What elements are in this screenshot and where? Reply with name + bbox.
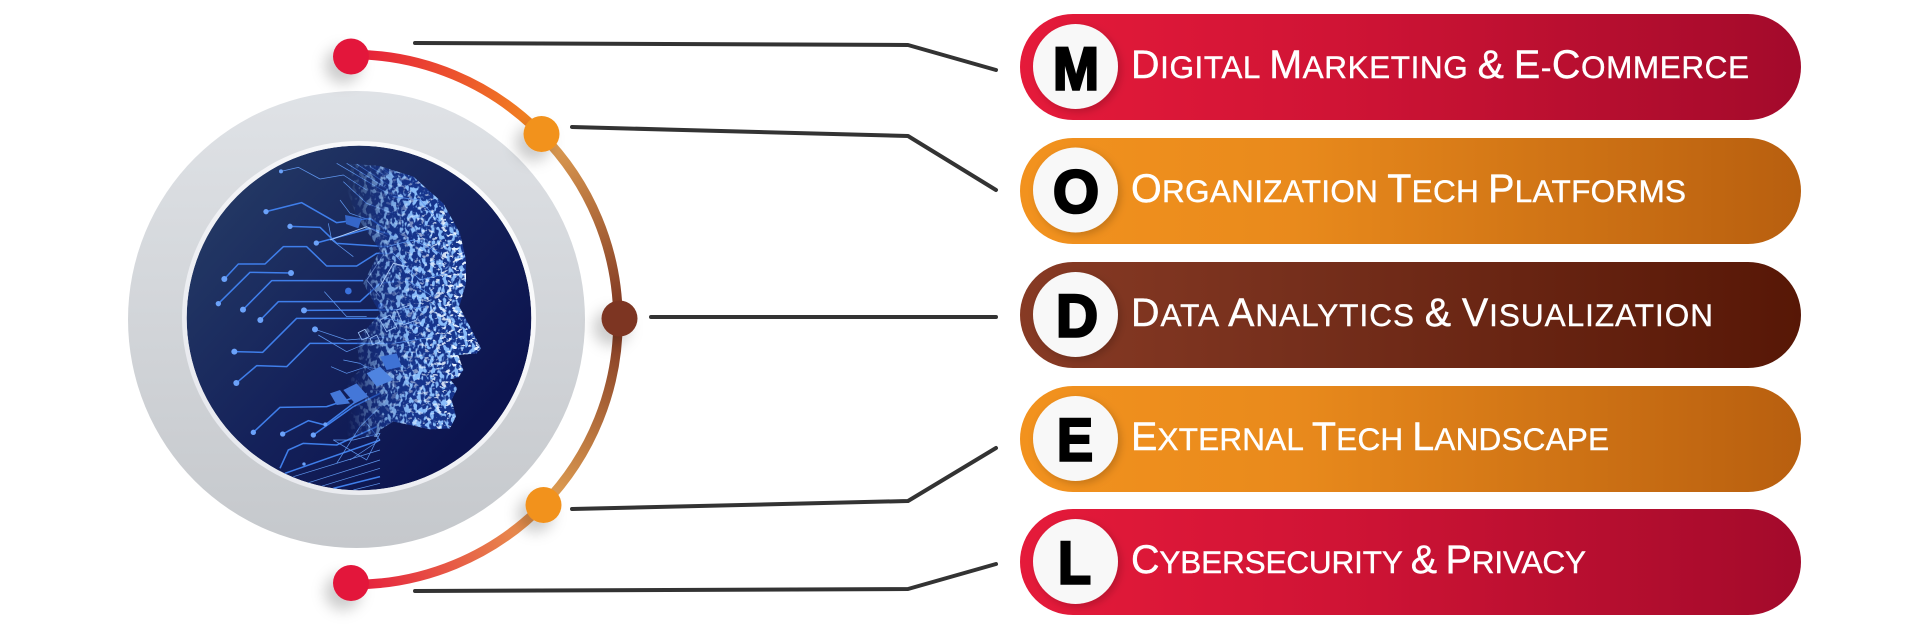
curved connector arc [351, 54, 618, 585]
letter E: E [1057, 406, 1093, 474]
pill background [1020, 138, 1801, 244]
panel: D Data Analytics & Visualization [1020, 262, 1801, 368]
pill background [1020, 14, 1801, 120]
node: upper orange [524, 116, 560, 152]
connector line L [415, 564, 996, 591]
grey outer ring [128, 91, 585, 548]
letter D: D [1056, 282, 1098, 350]
dark navy disc [187, 146, 531, 490]
circuit fragments over head [330, 197, 447, 405]
letter L: L [1058, 530, 1091, 596]
connector line M [415, 43, 996, 70]
letter badge [1033, 396, 1118, 481]
circuit traces [216, 163, 427, 490]
panel: M Digital Marketing & E-Commerce [1020, 14, 1801, 120]
letter badge [1033, 519, 1118, 604]
white inner ring [182, 141, 536, 495]
pill background [1020, 386, 1801, 492]
AI head illustration [187, 146, 531, 490]
head silhouette texture [350, 164, 481, 437]
arc segment: orange to bottom red [351, 505, 543, 585]
connector line D [651, 315, 996, 319]
arc segment: top red to orange [351, 54, 541, 134]
node: top red [333, 38, 369, 74]
letter badge [1033, 148, 1118, 232]
arc segment: orange to brown [541, 134, 618, 319]
panel: L Cybersecurity & Privacy [1020, 509, 1801, 615]
pill background [1020, 509, 1801, 615]
arc segment: brown to orange [543, 319, 618, 505]
letter M: M [1053, 36, 1099, 102]
letter badge [1033, 272, 1118, 357]
node: bottom red [333, 565, 369, 601]
pill background [1020, 262, 1801, 368]
connector line E [572, 448, 996, 509]
letter badge [1033, 24, 1118, 109]
connector line O [572, 127, 996, 190]
panel: E External Tech Landscape [1020, 386, 1801, 492]
node: brown [602, 300, 638, 336]
label: DATA ANALYTICS & VISUALIZATION [1131, 291, 1713, 335]
label: EXTERNAL TECH LANDSCAPE [1131, 415, 1609, 459]
label: DIGITAL MARKETING & E-COMMERCE [1131, 43, 1749, 87]
node: lower orange [526, 487, 562, 523]
label: CYBERSECURITY & PRIVACY [1131, 538, 1586, 582]
letter O: O [1053, 158, 1099, 226]
panel: O Organization Tech Platforms [1020, 138, 1801, 244]
label: ORGANIZATION TECH PLATFORMS [1131, 167, 1686, 211]
